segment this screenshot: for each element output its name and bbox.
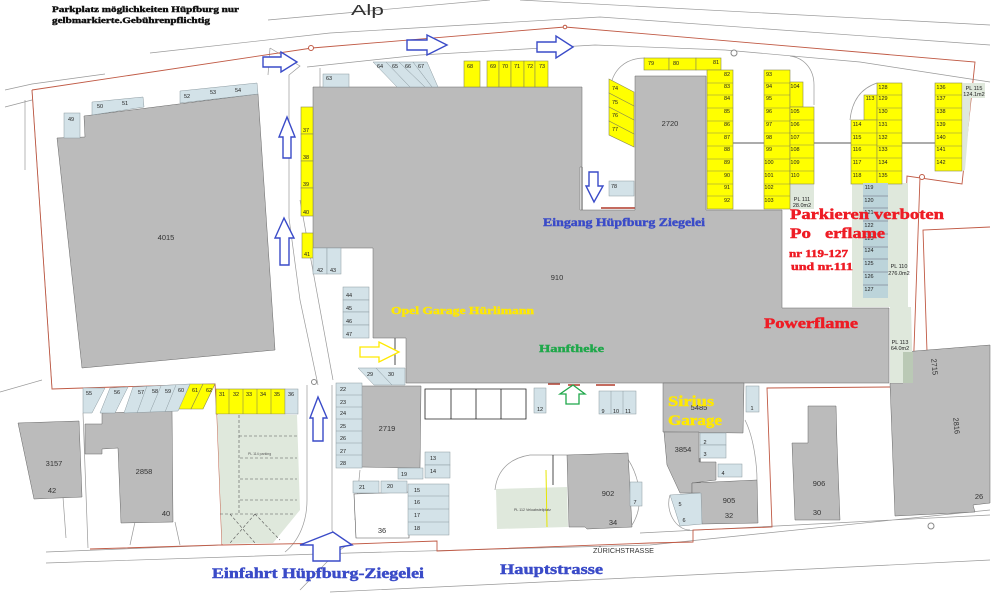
building 4015: 4015 — [158, 233, 174, 242]
spaces 113-118 — [851, 95, 877, 184]
spaces 119-127: 122 — [864, 223, 874, 229]
spaces 37-41: 41 — [304, 252, 310, 258]
spaces 22-28 — [336, 383, 362, 468]
spaces 79-81 — [644, 58, 721, 70]
building 2858: 2858 — [136, 467, 152, 476]
space 78: 78 — [611, 184, 617, 190]
spaces 113-118: 115 — [853, 135, 861, 141]
spaces 37-41: 37 — [303, 128, 309, 134]
spaces 68-73: 69 — [490, 64, 496, 70]
spaces 22-28: 26 — [340, 436, 346, 442]
spaces 31-35: 33 — [246, 392, 252, 398]
spaces 93-103: 96 — [766, 109, 772, 115]
spaces 1-6: 2 — [703, 440, 707, 446]
spaces 79-81: 80 — [673, 61, 679, 67]
annotation: Sirius Garage: Garage — [668, 413, 723, 429]
spaces 93-103: 94 — [766, 84, 772, 90]
building 4015 — [57, 94, 275, 368]
space 36: 36 — [288, 392, 294, 398]
spaces 68-73: 73 — [539, 64, 545, 70]
spaces 63-67: 66 — [405, 64, 411, 70]
spaces 82-92: 88 — [724, 147, 730, 153]
spaces 82-92: 83 — [724, 84, 730, 90]
spaces 63-67: 67 — [418, 64, 424, 70]
spaces 1-6: 4 — [721, 471, 725, 477]
spaces 113-118: 116 — [853, 147, 861, 153]
building 3854: 3854 — [675, 445, 691, 454]
spaces 29-30: 30 — [388, 372, 394, 378]
spaces 74-77 — [609, 79, 634, 147]
spaces 68-73: 70 — [502, 64, 508, 70]
spaces 128-135: 134 — [878, 160, 888, 166]
spaces 22-28: 23 — [340, 400, 346, 406]
spaces 82-92: 92 — [724, 198, 730, 204]
spaces 119-127: 120 — [864, 198, 874, 204]
spaces 82-92: 87 — [724, 135, 730, 141]
spaces 61-62 — [178, 384, 215, 409]
buildings — [18, 76, 990, 538]
zone PL 110 — [852, 183, 910, 307]
spaces 113-118: 118 — [853, 173, 861, 179]
annotation: Opel Garage: Opel Garage Hürlimann — [391, 305, 534, 317]
spaces 42-47: 44 — [346, 293, 352, 299]
spaces 55-60: 59 — [165, 389, 171, 395]
spaces 63-67: 64 — [377, 64, 383, 70]
spaces 74-77: 76 — [612, 113, 618, 119]
spaces 119-127: 124 — [864, 248, 874, 254]
spaces 82-92: 85 — [724, 109, 730, 115]
spaces 82-92: 82 — [724, 72, 730, 78]
spaces 13-21: 18 — [414, 526, 420, 532]
building 906: 30 — [813, 508, 821, 517]
zone PL 111: 28.0m2 — [793, 203, 811, 209]
spaces 13-21: 20 — [387, 484, 393, 490]
spaces 119-127: 127 — [864, 287, 874, 293]
spaces 1-6: 5 — [678, 502, 682, 508]
spaces 22-28: 25 — [340, 424, 346, 430]
building 905: 32 — [725, 511, 733, 520]
spaces 37-41 — [301, 107, 313, 258]
spaces 63-67: 63 — [326, 76, 332, 82]
spaces 93-103: 102 — [764, 185, 774, 191]
building 905 — [692, 480, 758, 524]
spaces 128-135 — [877, 83, 902, 184]
spaces 136-142: 141 — [936, 147, 946, 153]
green zones — [217, 83, 985, 544]
spaces 63-67: 65 — [392, 64, 398, 70]
spaces 9-12: 12 — [537, 407, 543, 413]
spaces 136-142: 139 — [936, 122, 946, 128]
spaces 13-21: 19 — [401, 472, 407, 478]
spaces 1-6 — [670, 386, 759, 526]
spaces 104-110 — [790, 82, 814, 184]
building 910 with 2720 — [313, 76, 889, 383]
spaces 74-77: 74 — [612, 86, 618, 92]
spaces 63-67 — [323, 62, 438, 87]
spaces 42-47: 42 — [317, 268, 323, 274]
spaces 104-110: 108 — [790, 147, 800, 153]
spaces 82-92: 84 — [724, 96, 730, 102]
annotation: Sirius Garage — [668, 394, 723, 429]
arrow: green up — [560, 385, 585, 404]
annotation: Powerflame: Powerflame — [764, 316, 858, 332]
spaces 49-54: 51 — [122, 101, 128, 107]
spaces 13-21: 17 — [414, 513, 420, 519]
spaces 37-41: 38 — [303, 155, 309, 161]
spaces 55-60: 56 — [114, 390, 120, 396]
spaces 93-103: 97 — [766, 122, 772, 128]
building 2719 — [361, 386, 421, 468]
spaces 136-142: 138 — [936, 109, 946, 115]
spaces 31-35: 31 — [219, 392, 225, 398]
spaces 93-103: 101 — [764, 173, 774, 179]
spaces 13-21: 21 — [359, 485, 365, 491]
annotation: Hanftheke: Hanftheke — [539, 343, 604, 355]
spaces 9-12: 10 — [613, 409, 619, 415]
spaces 104-110: 107 — [790, 135, 800, 141]
title — [52, 4, 239, 25]
zone PL 111: PL 111 — [794, 197, 810, 203]
arrow: big entry up — [300, 532, 352, 561]
spaces 136-142: 140 — [936, 135, 946, 141]
building 3157: 3157 — [46, 459, 62, 468]
spaces 42-47 — [313, 248, 369, 338]
navigation arrows — [263, 35, 603, 561]
building 3157 — [18, 421, 82, 499]
space 7: 7 — [633, 500, 637, 506]
arrow: right 3 — [537, 36, 573, 58]
spaces 136-142 — [935, 83, 962, 171]
spaces 113-118: 117 — [853, 160, 861, 166]
annotation: Parkieren verboten: und nr.111 — [791, 262, 853, 273]
annotation: Parkieren verboten: Po — [790, 226, 811, 242]
building 3854 — [664, 432, 716, 493]
spaces 128-135: 130 — [878, 109, 888, 115]
building 906: 906 — [813, 479, 825, 488]
spaces 74-77: 75 — [612, 100, 618, 106]
spaces 136-142: 142 — [936, 160, 946, 166]
spaces 113-118: 113 — [866, 96, 874, 102]
annotation: Parkieren verboten: nr 119-127 — [789, 249, 848, 260]
building 2719: 2719 — [379, 424, 395, 433]
spaces 68-73: 68 — [467, 64, 473, 70]
spaces 128-135: 131 — [878, 122, 888, 128]
spaces 119-127: 121 — [864, 210, 874, 216]
building 905: 905 — [723, 496, 735, 505]
spaces 104-110: 106 — [790, 122, 800, 128]
spaces 42-47: 46 — [346, 319, 352, 325]
spaces 49-54: 49 — [68, 117, 74, 123]
building 2816: 2816 — [951, 417, 962, 434]
spaces 61-62: 62 — [206, 388, 212, 394]
spaces 55-60: 55 — [86, 391, 92, 397]
annotation: Parkieren verboten: Parkieren verboten — [790, 207, 945, 223]
zone PL 115: 124.1m2 — [963, 92, 985, 98]
building 902: 34 — [609, 518, 617, 527]
spaces 104-110: 104 — [790, 84, 800, 90]
building Sirius 5485: 5485 — [691, 403, 707, 412]
building 906 — [792, 406, 840, 520]
spaces 119-127: 119 — [865, 185, 873, 191]
arrow: down — [586, 172, 603, 202]
spaces 49-54 — [64, 83, 258, 138]
spaces 93-103: 98 — [766, 135, 772, 141]
spaces 119-127: 126 — [864, 274, 874, 280]
annotation: Eingang: Eingang Hüpfburg Ziegelei — [543, 217, 706, 229]
space 36 — [285, 389, 298, 414]
small plan labels — [351, 2, 654, 555]
spaces 82-92: 91 — [724, 185, 730, 191]
zone lot 34 — [496, 470, 568, 529]
spaces 22-28: 28 — [340, 461, 346, 467]
spaces 13-21: 14 — [430, 469, 436, 475]
spaces 37-41: 40 — [303, 210, 309, 216]
spaces 82-92: 86 — [724, 122, 730, 128]
zone PL 115: PL 115 — [966, 86, 982, 92]
arrow: yellow right — [360, 342, 399, 362]
spaces 22-28: 27 — [340, 449, 346, 455]
spaces 113-118: 114 — [853, 122, 861, 128]
spaces 104-110: 109 — [790, 160, 800, 166]
annotation: Hauptstrasse: Hauptstrasse — [500, 562, 603, 578]
spaces 104-110: 110 — [791, 173, 799, 179]
spaces 55-60 — [83, 384, 190, 413]
zone lot 34: PL 112 Veloabstellplatz — [514, 508, 551, 512]
Alp road label: Alp — [351, 2, 384, 19]
spaces 49-54: 53 — [210, 90, 216, 96]
spaces 74-77: 77 — [612, 127, 618, 133]
spaces 55-60: 58 — [152, 389, 158, 395]
yellow parking spaces — [178, 58, 962, 414]
spaces 93-103: 103 — [764, 198, 774, 204]
spaces 136-142: 136 — [936, 85, 946, 91]
spaces 119-127 — [863, 183, 888, 298]
spaces 79-81: 79 — [648, 61, 654, 67]
spaces 68-73: 72 — [527, 64, 533, 70]
spaces 93-103 — [764, 70, 790, 209]
spaces 55-60: 60 — [178, 388, 184, 394]
spaces 37-41: 39 — [303, 182, 309, 188]
space 7 — [630, 482, 642, 506]
space 78 — [609, 181, 634, 196]
annotation: Sirius Garage: Sirius — [668, 394, 714, 410]
spaces 79-81: 81 — [713, 60, 719, 66]
spaces 68-73 — [464, 61, 548, 87]
spaces 82-92: 89 — [724, 160, 730, 166]
spaces 49-54: 50 — [97, 104, 103, 110]
annotation: Parkieren verboten — [789, 207, 945, 273]
title: gelbmarkierte.Gebührenpflichtig — [52, 15, 211, 25]
spaces 61-62: 61 — [192, 388, 198, 394]
spaces 42-47: 47 — [346, 332, 352, 338]
spaces 119-127: 125 — [864, 261, 874, 267]
building 910 with 2720: 2720 — [662, 119, 678, 128]
spaces 29-30 — [358, 368, 405, 385]
spaces 136-142: 137 — [936, 96, 946, 102]
building 2816: 26 — [975, 492, 983, 501]
spaces 31-35 — [216, 389, 285, 414]
building 2816: 2715 — [929, 358, 940, 375]
spaces 9-12 — [534, 388, 636, 415]
spaces 13-21: 13 — [430, 456, 436, 462]
zone PL 111 — [790, 184, 814, 209]
arrow: up 2 — [275, 218, 294, 265]
spaces 13-21 — [353, 452, 450, 535]
spaces 31-35: 35 — [274, 392, 280, 398]
arrow: right 2 — [407, 35, 447, 55]
spaces 82-92: 90 — [724, 173, 730, 179]
building 902: 902 — [602, 489, 614, 498]
spaces 22-28: 22 — [340, 387, 346, 393]
building 910 with 2720: 910 — [551, 273, 563, 282]
zone PL 110: PL 110 — [891, 264, 907, 270]
spaces 82-92 — [707, 70, 733, 209]
arrow: right 1 — [263, 52, 297, 72]
spaces 1-6: 1 — [750, 406, 754, 412]
arrow: up 1 — [279, 117, 295, 158]
spaces 9-12: 9 — [601, 409, 605, 415]
annotation: Einfahrt: Einfahrt Hüpfburg-Ziegelei — [212, 566, 424, 582]
spaces 93-103: 93 — [766, 72, 772, 78]
zone PL 113: 64.0m2 — [891, 346, 909, 352]
spaces 128-135: 135 — [878, 173, 888, 179]
spaces 93-103: 95 — [766, 96, 772, 102]
building 2816 — [890, 345, 990, 516]
spaces 22-28: 24 — [340, 411, 346, 417]
building 2858 — [85, 411, 173, 523]
zone PL 113 — [890, 307, 913, 383]
building 3157: 42 — [48, 486, 56, 495]
zone lot lower left — [217, 415, 300, 544]
zone lot lower left: PL 114 parking — [248, 452, 271, 456]
spaces 9-12: 11 — [625, 409, 631, 415]
building 902 — [567, 453, 632, 529]
spaces 55-60: 57 — [138, 390, 144, 396]
spaces 104-110: 105 — [790, 109, 800, 115]
spaces 49-54: 52 — [184, 94, 190, 100]
spaces 128-135: 129 — [878, 96, 888, 102]
garage 36: 36 — [378, 526, 386, 535]
Zürichstrasse road label: ZÜRICHSTRASSE — [593, 546, 654, 555]
spaces 93-103: 99 — [766, 147, 772, 153]
spaces 13-21: 16 — [414, 500, 420, 506]
arrow: up 3 — [310, 397, 327, 441]
zone PL 110: 276.0m2 — [888, 271, 910, 277]
spaces 1-6: 3 — [703, 452, 707, 458]
spaces 13-21: 15 — [414, 488, 420, 494]
spaces 42-47: 43 — [330, 268, 336, 274]
spaces 119-127: 123 — [864, 236, 874, 242]
spaces 128-135: 133 — [878, 147, 888, 153]
zone PL 113: PL 113 — [892, 340, 908, 346]
annotation: Parkieren verboten: erflame — [825, 226, 885, 242]
zone PL 115 — [963, 83, 985, 171]
spaces 1-6: 6 — [682, 518, 686, 524]
building Sirius 5485 — [663, 383, 744, 433]
spaces 49-54: 54 — [235, 88, 241, 94]
spaces 93-103: 100 — [764, 160, 774, 166]
blue parking spaces — [64, 62, 888, 535]
title: Parkplatz möglichkeiten Hüpfburg nur — [52, 4, 239, 14]
spaces 31-35: 32 — [233, 392, 239, 398]
spaces 31-35: 34 — [260, 392, 266, 398]
spaces 128-135: 132 — [878, 135, 888, 141]
spaces 128-135: 128 — [878, 85, 888, 91]
spaces 68-73: 71 — [514, 64, 520, 70]
spaces 42-47: 45 — [346, 306, 352, 312]
spaces 29-30: 29 — [367, 372, 373, 378]
building 2858: 40 — [162, 509, 170, 518]
garage 36 — [354, 492, 409, 538]
